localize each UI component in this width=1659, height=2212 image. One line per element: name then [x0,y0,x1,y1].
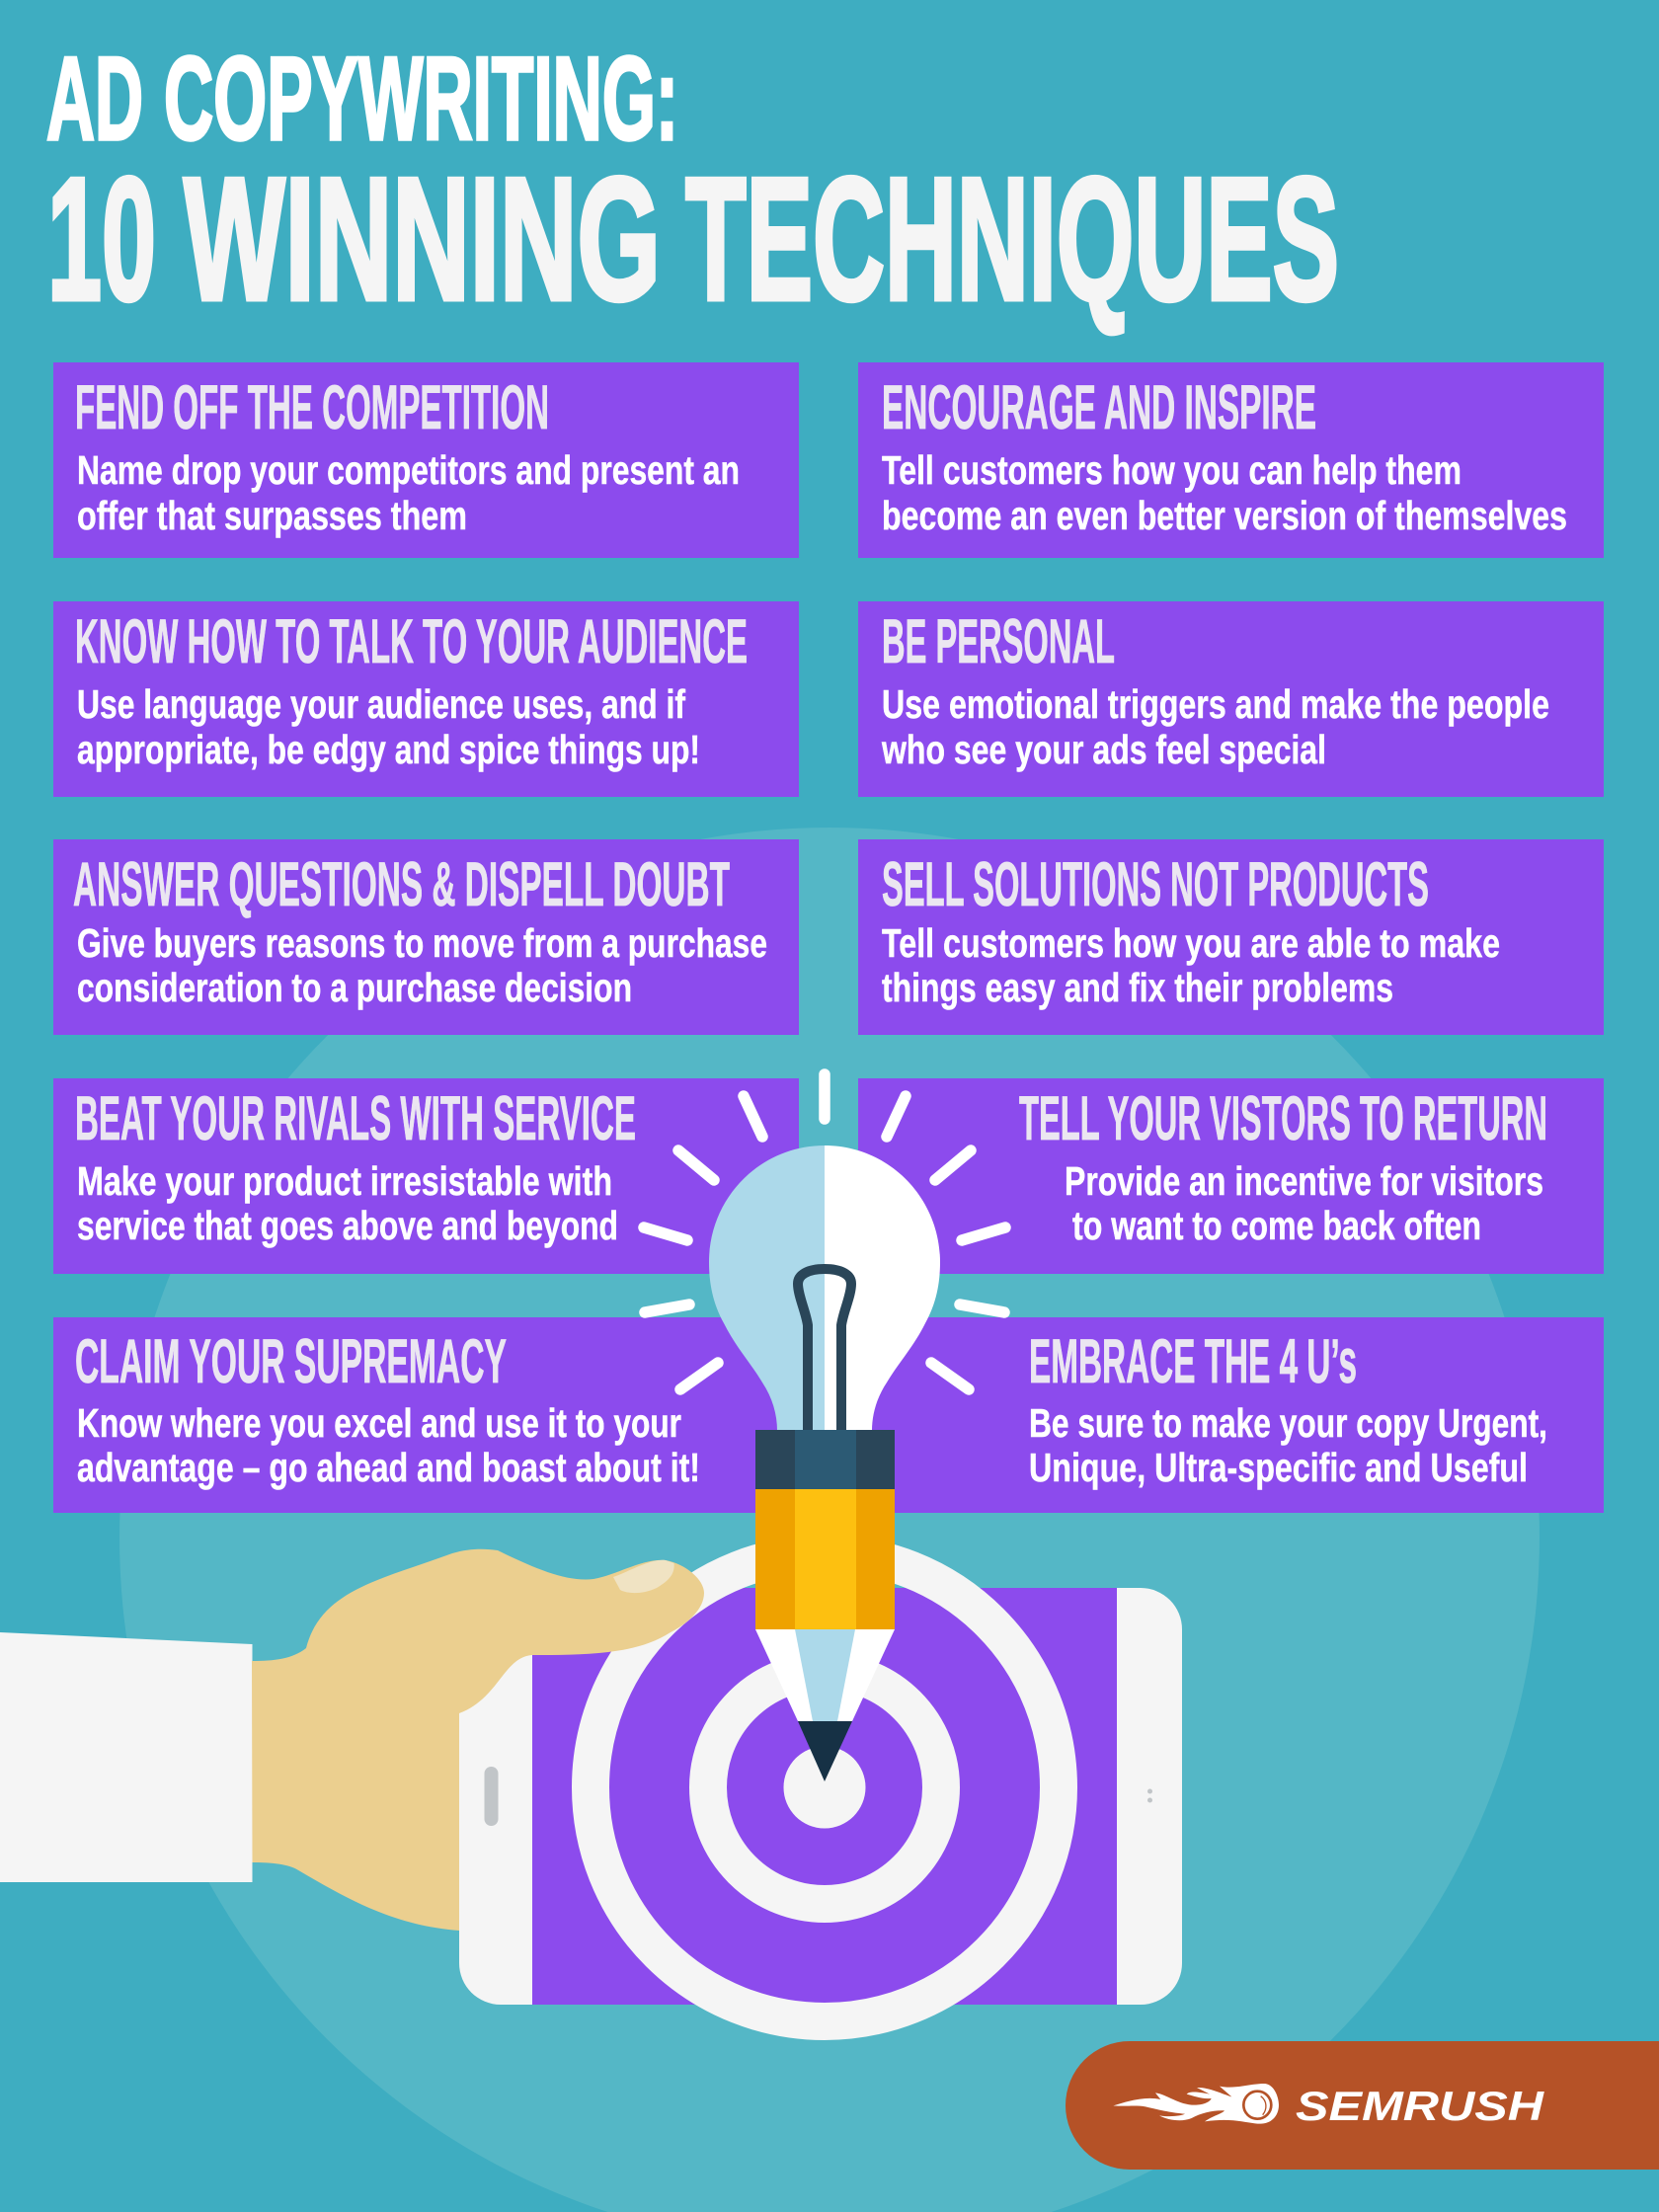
panel: claim your supremacy: advantage – go ahead and boast about it! [77,1445,700,1490]
panel: answer questions and dispell doubt [53,839,799,1035]
logo: semrush: SEMRUSH [1296,2083,1545,2129]
title: WINNING [184,141,661,337]
panel: beat your rivals with service [53,1078,799,1274]
panel: sell solutions not products: Tell customers how you are able to make [882,920,1500,966]
panel: sell solutions not products [858,839,1604,1035]
icon: phone with target [459,1553,1182,2021]
panel: know how to talk to your audience: Use language your audience uses, and if [77,681,685,727]
panel: encourage and inspire: Tell customers how you can help them [882,447,1462,493]
panel: answer questions and dispell doubt: consideration to a purchase decision [77,965,632,1010]
panel: encourage and inspire [858,362,1604,558]
panel: embrace the 4 Us: Unique, Ultra-specific and Useful [1029,1445,1528,1490]
panel: beat your rivals with service: Make your product irresistable with [77,1158,612,1204]
panel: claim your supremacy [53,1317,799,1513]
panel: be personal [858,601,1604,797]
icon: light rays [644,1074,1005,1389]
panel: embrace the 4 Us: EMBRACE THE 4 U’s [1029,1327,1357,1396]
panel: tell your vistors to return: to want to come back often [1072,1203,1481,1248]
panel: be personal: who see your ads feel special [881,727,1326,772]
panel: answer questions and dispell doubt: ANSWER QUESTIONS & DISPELL DOUBT [73,850,730,919]
panel: beat your rivals with service: service that goes above and beyond [77,1203,618,1248]
panel: beat your rivals with service: BEAT YOUR RIVALS WITH SERVICE [75,1084,636,1153]
panel: fend off the competition: FEND OFF THE COMPETITION [75,373,549,442]
title: COPYWRITING: [164,33,678,165]
title: 10 [47,141,156,337]
panel: fend off the competition [53,362,799,558]
logo: semrush [1113,2083,1545,2129]
panel: fend off the competition: Name drop your competitors and present an [77,447,740,493]
panel: claim your supremacy: CLAIM YOUR SUPREMACY [75,1327,507,1396]
panel: tell your vistors to return [858,1078,1604,1274]
panel: claim your supremacy: Know where you excel and use it to your [77,1400,681,1446]
icon: light bulb [709,1146,940,1431]
icon: hand [252,1549,704,1931]
panel: embrace the 4 Us [858,1317,1604,1513]
icon: sleeve [0,1632,253,1882]
panel: know how to talk to your audience: appropriate, be edgy and spice things up! [77,727,700,772]
panel: know how to talk to your audience [53,601,799,797]
title: AD [46,33,143,165]
panel: know how to talk to your audience: KNOW HOW TO TALK TO YOUR AUDIENCE [75,607,748,676]
panel: sell solutions not products: things easy and fix their problems [882,965,1393,1010]
background circle [119,828,1540,2212]
icon: pencil [755,1430,895,1781]
panel: be personal: BE PERSONAL [882,607,1115,676]
title [46,33,1339,337]
panel: fend off the competition: offer that surpasses them [77,493,467,538]
logo pill [1066,2041,1659,2170]
panel: answer questions and dispell doubt: Give buyers reasons to move from a purchase [77,920,767,966]
